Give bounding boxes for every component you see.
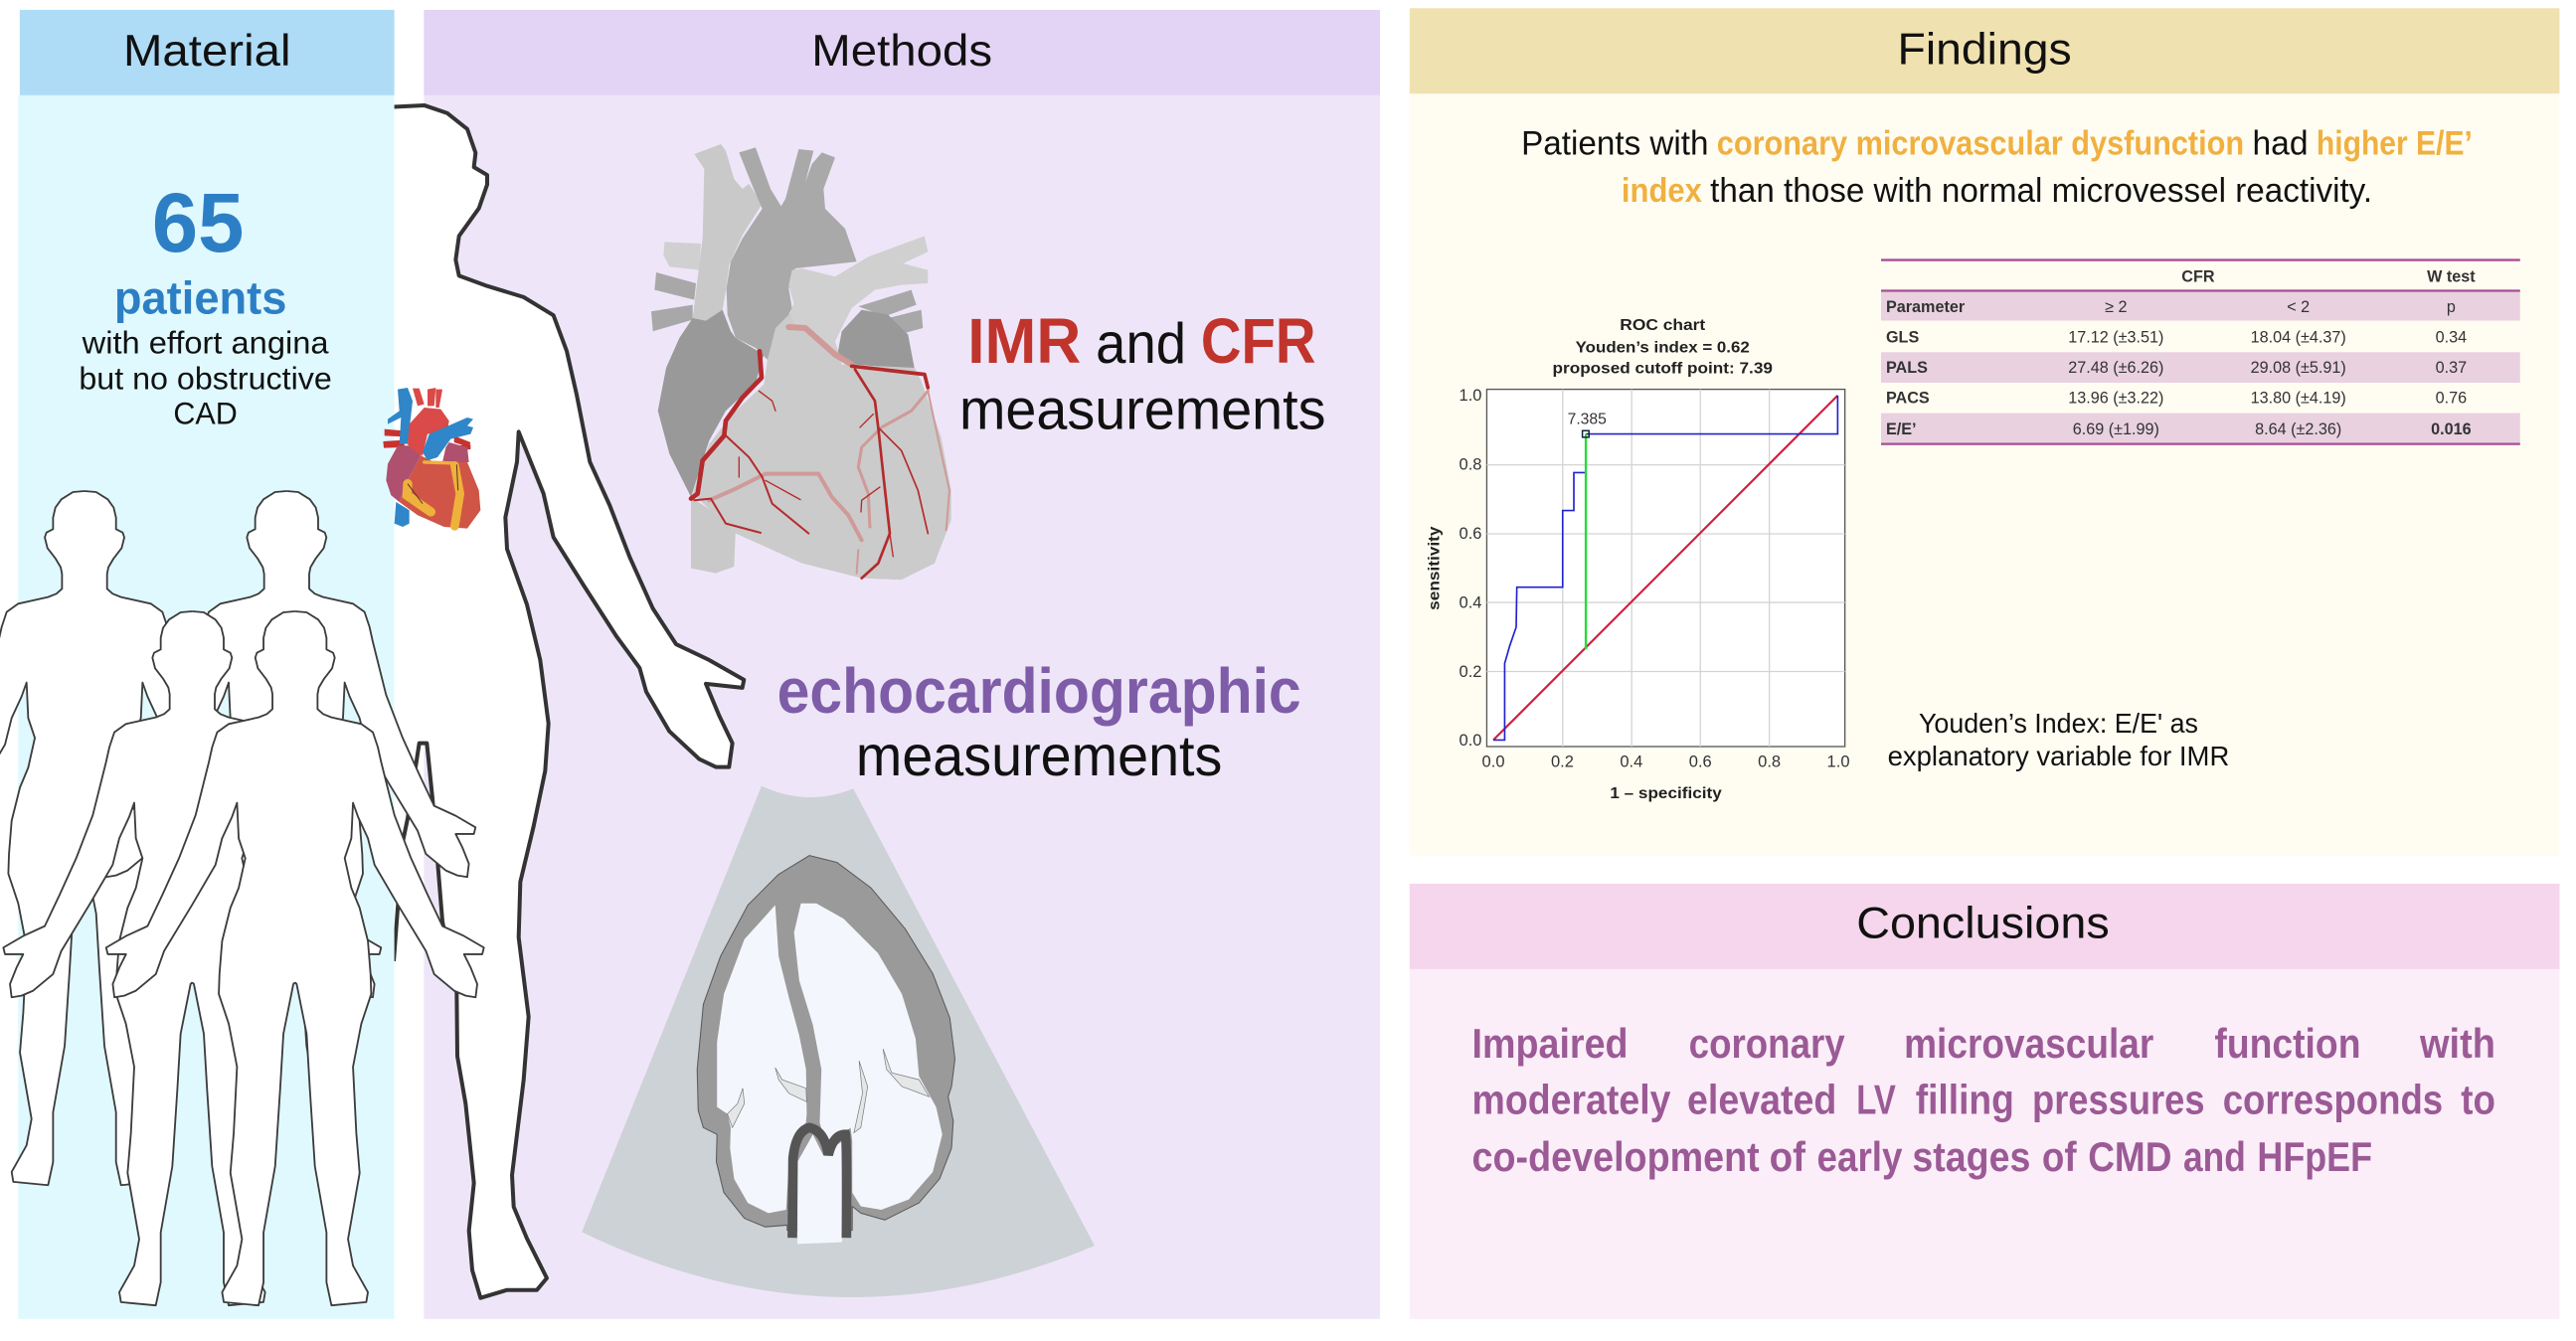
ROC title (1553, 317, 1773, 378)
findings heading: Findings (1898, 25, 2072, 74)
label: IMR and CFR measurements: and (1096, 312, 1186, 376)
conclusions statement: of (1770, 1134, 1805, 1180)
inferior vena cava (691, 497, 736, 574)
large patient silhouette (394, 105, 744, 1298)
material heading: Material (123, 27, 291, 76)
conclusions statement: to (2461, 1077, 2495, 1122)
Youden index caption: explanatory variable for IMR (1888, 741, 2229, 771)
label: IMR and CFR measurements: CFR (1201, 305, 1316, 377)
table: CFR parameters: 0.37 (2436, 359, 2467, 377)
label: IMR and CFR measurements: measurements (959, 378, 1326, 441)
conclusions heading (1410, 884, 2559, 969)
table: CFR parameters: 6.69 (±1.99) (2073, 420, 2159, 438)
axis tick labels: 0.8 (1758, 753, 1781, 771)
conclusions statement: CMD (2088, 1134, 2171, 1180)
findings statement: Patients with (1521, 124, 1709, 162)
axis tick labels: 0.0 (1460, 731, 1481, 750)
panel: conclusions (1410, 884, 2559, 1319)
icon: grey anatomical heart with coronary arteries (651, 144, 951, 580)
patient count text: with effort angina (82, 325, 329, 360)
panel: methods (424, 10, 1380, 1319)
pale coronary veins (709, 327, 949, 574)
conclusions statement: coronary (1689, 1021, 1845, 1067)
axis tick labels: 0.2 (1460, 662, 1481, 681)
patient count text: patients (114, 272, 286, 324)
findings statement: higher E/E’ (2317, 124, 2473, 162)
patient count text: CAD (173, 396, 238, 430)
table: CFR parameters (1881, 260, 2520, 444)
conclusions statement: Impaired (1472, 1021, 1629, 1067)
Youden index caption: Youden’s Index: E/E' as (1919, 708, 2198, 739)
conclusions statement: microvascular (1904, 1021, 2153, 1067)
table: CFR parameters: 0.34 (2436, 329, 2467, 347)
right-side chambers (794, 904, 943, 1210)
axis tick labels: 0.6 (1689, 753, 1712, 771)
pulmonary veins (651, 242, 923, 333)
patient count text (79, 176, 332, 430)
conclusions statement: with (2419, 1021, 2495, 1067)
Youden cutoff marker (1568, 411, 1607, 649)
axis titles: sensitivity (1427, 526, 1444, 610)
table: CFR parameters: 0.016 (2431, 420, 2472, 438)
conclusions statement: and (2183, 1134, 2246, 1180)
ROC title: Youden’s index = 0.62 (1576, 339, 1750, 356)
label: IMR and CFR measurements (959, 305, 1326, 441)
axis tick labels: 1.0 (1460, 386, 1481, 405)
conclusions statement: pressures (2032, 1077, 2205, 1122)
conclusions statement (1472, 1021, 2495, 1180)
findings statement: index (1622, 172, 1703, 210)
sensitivity curve (1493, 396, 1837, 740)
conclusions statement: corresponds (2223, 1077, 2443, 1122)
conclusions statement: elevated (1687, 1077, 1836, 1122)
pulmonary artery (788, 236, 928, 358)
patient count text: 65 (152, 176, 244, 269)
axis tick labels (1460, 386, 1850, 771)
ventricles (693, 313, 951, 580)
icon: front-row patient silhouette right (106, 611, 484, 1305)
Youden index caption (1888, 708, 2229, 771)
chart: ROC curve (1427, 317, 1850, 802)
conclusions heading: Conclusions (1856, 900, 2110, 948)
diagonal reference line (1493, 396, 1837, 740)
table: CFR parameters: PALS (1886, 359, 1928, 377)
conclusions statement: moderately (1472, 1077, 1671, 1122)
table: CFR parameters: 18.04 (±4.37) (2251, 329, 2346, 347)
conclusions statement: HFpEF (2257, 1134, 2372, 1180)
myocardium (697, 856, 955, 1231)
table: CFR parameters: W test (2427, 267, 2476, 285)
findings statement: coronary microvascular dysfunction (1717, 124, 2244, 162)
table: CFR parameters: 8.64 (±2.36) (2255, 420, 2341, 438)
table: CFR parameters: Parameter (1886, 298, 1966, 316)
conclusions statement: stages (1912, 1134, 2030, 1180)
axis titles: 1 – specificity (1610, 785, 1722, 802)
table: CFR parameters: 13.80 (±4.19) (2251, 390, 2346, 408)
panel: material (18, 10, 395, 1319)
table: CFR parameters: 13.96 (±3.22) (2068, 390, 2163, 408)
table: CFR parameters: p (2447, 298, 2456, 316)
findings statement (1521, 124, 2473, 210)
axis tick labels: 0.6 (1460, 524, 1481, 543)
label: echocardiographic measurements: echocardiographic (777, 655, 1301, 727)
ultrasound fan (582, 786, 1095, 1297)
axis tick labels: 0.4 (1460, 592, 1481, 611)
findings statement: than those with normal microvessel reactivity. (1710, 172, 2372, 210)
label: echocardiographic measurements: measurements (856, 725, 1222, 788)
table: CFR parameters: 27.48 (±6.26) (2068, 359, 2163, 377)
table: CFR parameters: GLS (1886, 329, 1919, 347)
conclusions statement: function (2214, 1021, 2361, 1067)
conclusions statement: filling (1916, 1077, 2014, 1122)
Youden cutoff marker: 7.385 (1568, 411, 1607, 427)
axis titles (1427, 526, 1722, 802)
ROC title: proposed cutoff point: 7.39 (1553, 361, 1773, 378)
table: CFR parameters: 29.08 (±5.91) (2251, 359, 2346, 377)
label: IMR and CFR measurements: IMR (967, 305, 1081, 377)
methods heading (424, 10, 1380, 95)
patient count text: but no obstructive (79, 362, 332, 397)
table: CFR parameters: PACS (1886, 390, 1930, 408)
red coronary arteries (691, 351, 928, 579)
outflow tract (797, 1134, 842, 1244)
right atrium (658, 310, 764, 497)
axis tick labels: 0.8 (1460, 455, 1481, 474)
icon: back-row patient silhouette right (97, 491, 475, 1185)
table: CFR parameters: ≥ 2 (2105, 298, 2127, 316)
conclusions statement: co-development (1472, 1134, 1760, 1180)
table: CFR parameters: 17.12 (±3.51) (2068, 329, 2163, 347)
icon: echocardiogram four-chamber view (582, 786, 1095, 1297)
icon: coloured heart (383, 388, 480, 529)
conclusions statement: of (2042, 1134, 2077, 1180)
axis tick labels: 0.4 (1620, 753, 1642, 771)
conclusions statement: early (1817, 1134, 1903, 1180)
methods heading: Methods (811, 27, 992, 76)
ROC title: ROC chart (1620, 317, 1706, 334)
conclusions statement: LV (1856, 1077, 1896, 1122)
aorta (727, 147, 857, 361)
panel: findings (1410, 8, 2559, 856)
label: echocardiographic measurements (777, 655, 1301, 788)
superior vena cava (693, 144, 763, 321)
axis tick labels: 0.2 (1551, 753, 1574, 771)
icon: front-row patient silhouette left (3, 611, 381, 1305)
axis tick labels: 0.0 (1482, 753, 1505, 771)
left-side chambers (717, 905, 806, 1213)
table: CFR parameters: 0.76 (2436, 390, 2467, 408)
left atrium (837, 310, 915, 370)
findings statement: had (2252, 124, 2309, 162)
table: CFR parameters: CFR (2181, 267, 2215, 285)
icon: back-row patient silhouette left (0, 491, 273, 1185)
table: CFR parameters: E/E’ (1886, 420, 1917, 438)
valve leaflets (728, 1049, 930, 1132)
table: CFR parameters: < 2 (2287, 298, 2310, 316)
axis tick labels: 1.0 (1827, 753, 1850, 771)
findings heading (1410, 8, 2559, 93)
material heading (20, 10, 395, 95)
